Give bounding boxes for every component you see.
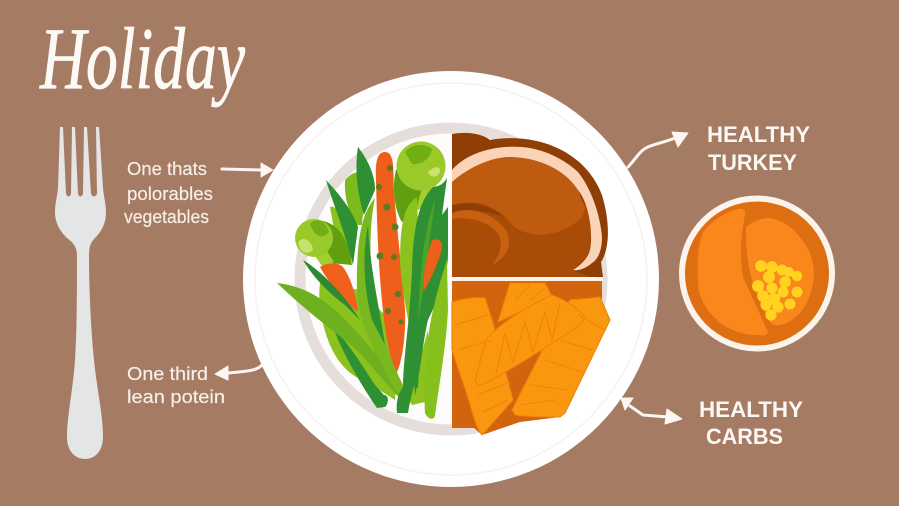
arrow: to vegetables	[222, 163, 273, 177]
carrot: right	[424, 239, 442, 291]
leaf: centre	[357, 198, 408, 403]
carrot: centre	[376, 152, 405, 372]
arrow: to lean protein	[215, 364, 263, 380]
carrot: left	[320, 263, 358, 312]
heading: healthy turkey	[707, 122, 810, 175]
heading: healthy carbs: CARBS	[706, 424, 783, 449]
soup bowl	[682, 198, 832, 348]
label: lean protein	[127, 363, 225, 407]
heading: healthy turkey: HEALTHY	[707, 122, 810, 147]
arrow: healthy carbs	[621, 398, 682, 424]
label: lean protein: One third	[127, 363, 208, 384]
corn kernels	[752, 260, 802, 321]
label: vegetables: polorables	[127, 183, 213, 204]
leaf: right light	[400, 197, 420, 340]
bunch: right dark	[397, 178, 448, 413]
heading: healthy carbs: HEALTHY	[699, 397, 803, 422]
heading: healthy carbs	[699, 397, 803, 449]
plate	[243, 71, 659, 487]
sprout: left	[295, 219, 352, 266]
heading: healthy turkey: TURKEY	[708, 150, 797, 175]
label: vegetables: One thats	[127, 158, 207, 179]
icon: fork	[55, 127, 106, 459]
carbs: sweet potato wedges	[452, 281, 610, 435]
label: vegetables	[124, 158, 213, 227]
leaf: long light	[277, 283, 407, 400]
label: vegetables: vegetables	[124, 206, 209, 227]
title: Holiday	[39, 11, 246, 108]
wedge texture	[455, 285, 605, 412]
turkey	[452, 133, 608, 277]
arrow: healthy turkey	[628, 132, 688, 167]
vegetables	[277, 142, 448, 419]
label: lean protein: lean potein	[127, 386, 225, 407]
plate divider	[452, 278, 603, 281]
sprout: top right	[394, 142, 446, 222]
